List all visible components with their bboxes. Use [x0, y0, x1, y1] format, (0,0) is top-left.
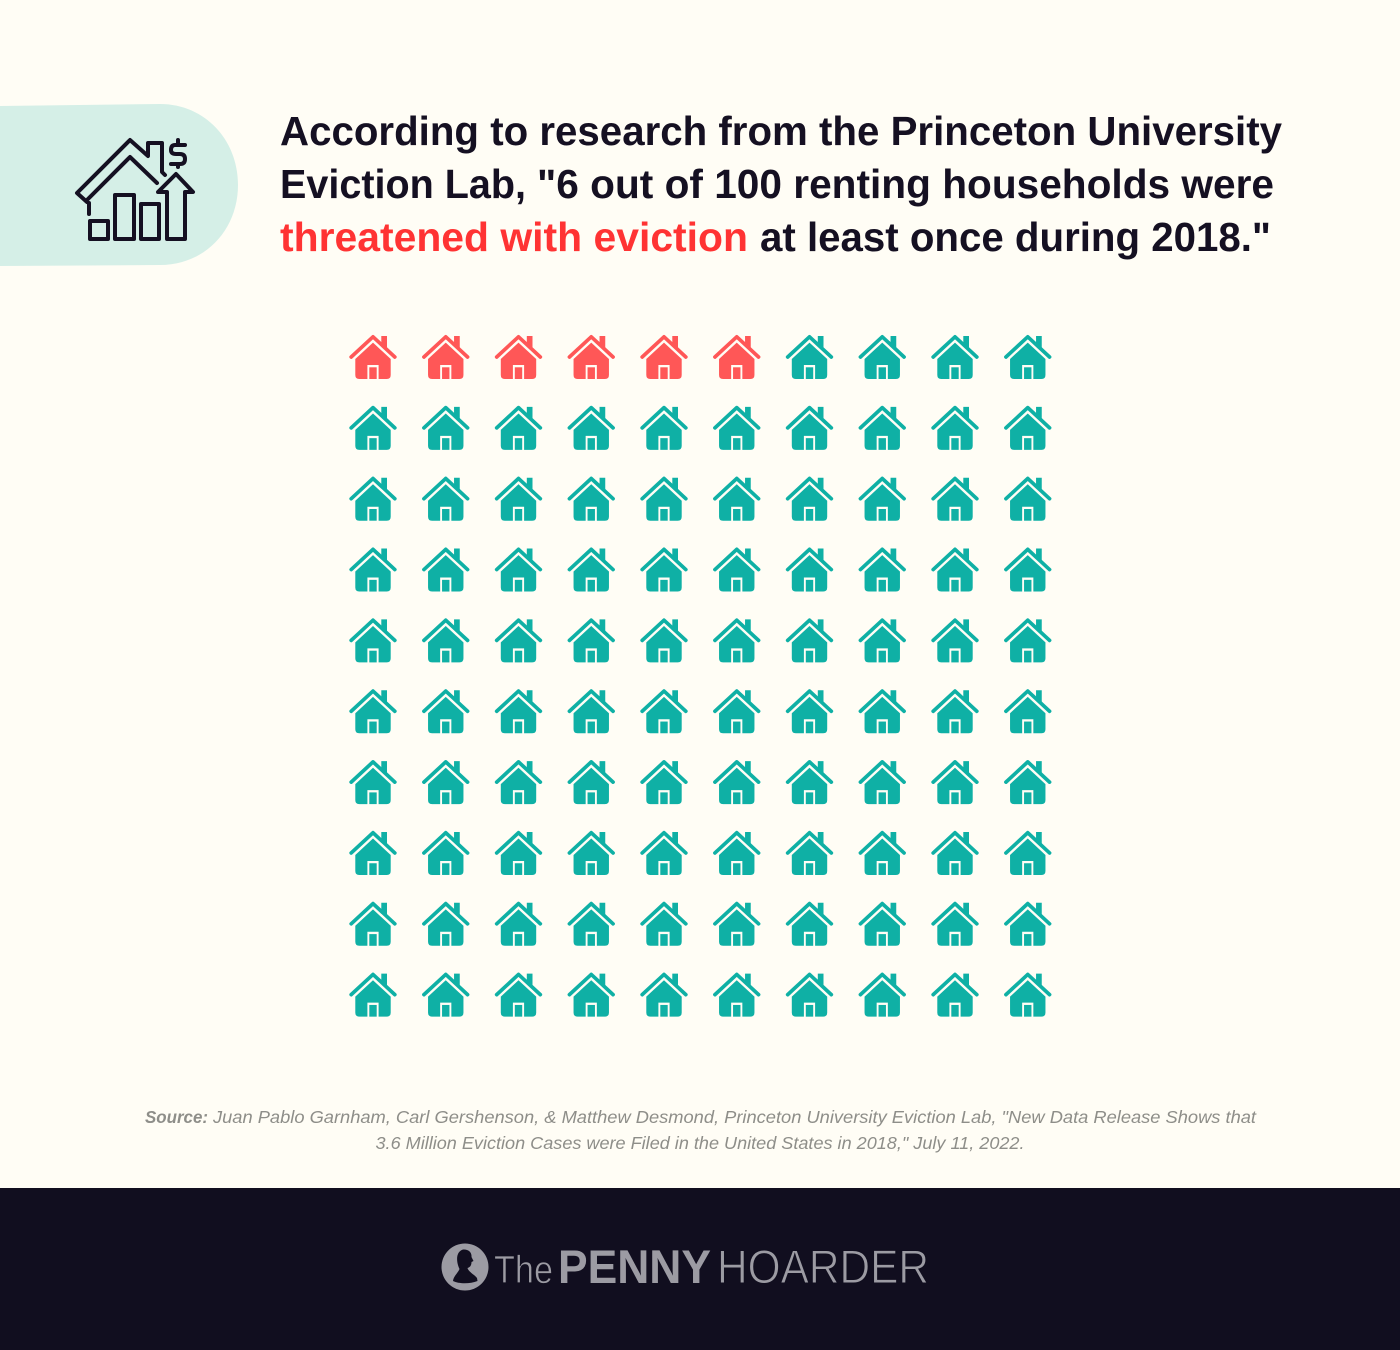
heading: "6 out of 100 renting households were [537, 161, 1274, 207]
logo: The Penny Hoarder: HOARDER [717, 1240, 929, 1293]
rows 2 to 10 of teal houses [351, 407, 1050, 1017]
logo coin with silhouette [442, 1244, 488, 1290]
icon: house with rising bars and dollar sign [77, 140, 193, 239]
logo wordmark: The [494, 1249, 553, 1292]
footer band [0, 1188, 1400, 1350]
heading: Eviction Lab, [280, 161, 526, 207]
badge shape [0, 104, 238, 266]
logo: The Penny Hoarder: PENNY [558, 1240, 711, 1293]
icon badge [0, 104, 238, 266]
source note: Source: [145, 1107, 208, 1127]
heading: threatened with eviction [280, 214, 748, 260]
source note: Juan Pablo Garnham, Carl Gershenson, & Matthew Desmond, Princeton University Eviction Lab, "New Data Release Shows that [212, 1107, 1257, 1127]
logo: The Penny Hoarder [442, 1240, 929, 1293]
heading: at least once during 2018." [760, 214, 1271, 260]
heading [280, 108, 1282, 260]
row 1 with six red houses [351, 336, 1050, 379]
source note: 3.6 Million Eviction Cases were Filed in the United States in 2018," July 11, 2022. [376, 1133, 1024, 1153]
source note [145, 1107, 1257, 1153]
heading: According to research from the Princeton University [280, 108, 1282, 154]
pictogram: 100 households, 6 threatened [351, 336, 1050, 1017]
